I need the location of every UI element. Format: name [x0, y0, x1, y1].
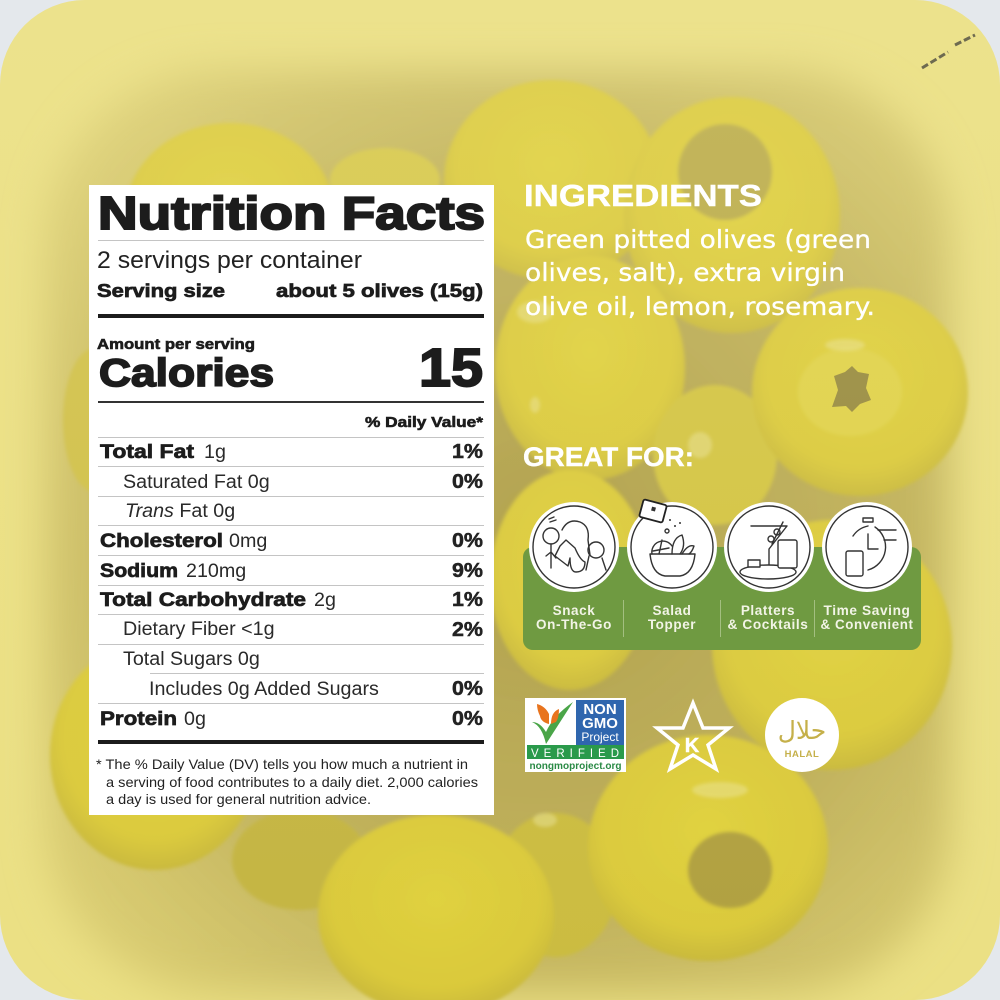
panel: great for band: [523, 499, 921, 650]
icon: time saving: [822, 502, 912, 592]
badge: star k kosher: [657, 703, 729, 769]
ingredients text: olive oil, lemon, rosemary.: [525, 292, 875, 321]
row: total fat: Total Fat: [100, 441, 195, 463]
row: total carbohydrate: 1%: [452, 589, 483, 611]
label: snack on the go: Snack: [553, 603, 595, 618]
daily value header: % Daily Value*: [365, 414, 483, 431]
icon: snack on the go: [529, 502, 619, 592]
row: saturated fat: Saturated Fat 0g: [123, 471, 270, 493]
serving size: about 5 olives (15g): [276, 281, 483, 301]
label: salad topper: Salad: [652, 603, 692, 618]
calories block: [97, 337, 483, 398]
row: total fat: [100, 441, 483, 463]
row: dietary fiber: Dietary Fiber <1g: [123, 618, 275, 640]
row: total fat: 1%: [452, 441, 483, 463]
ingredients text: Green pitted olives (green: [525, 225, 871, 254]
badge: halal: HALAL: [785, 749, 819, 760]
label: time saving and convenient: Time Saving: [824, 603, 910, 618]
row: dietary fiber: [123, 618, 483, 641]
heading: ingredients: INGREDIENTS: [524, 178, 762, 213]
row: trans fat: Trans Fat 0g: [125, 500, 235, 522]
label: platters and cocktails: [728, 603, 808, 632]
row: protein: 0%: [452, 708, 483, 730]
panel: nutrition facts: [89, 185, 494, 815]
row: protein: [100, 708, 483, 730]
label: salad topper: [648, 603, 696, 632]
label: salad topper: Topper: [648, 617, 696, 632]
badge: non gmo project verified: NON: [583, 701, 617, 718]
row: added sugars: [149, 678, 483, 700]
badge: non gmo project verified: VERIFIED: [531, 748, 619, 760]
row: total carbohydrate: Total Carbohydrate: [100, 589, 306, 611]
badge: non gmo project verified: nongmoproject.org: [530, 761, 622, 772]
row: total fat: 1g: [204, 441, 226, 463]
row: saturated fat: [123, 471, 483, 493]
icon: platters and cocktails: [724, 502, 814, 592]
badge: non gmo project verified: GMO: [582, 715, 618, 732]
icon: salad topper: [627, 499, 717, 592]
label: platters and cocktails: Platters: [741, 603, 795, 618]
calories block: 15: [419, 338, 483, 398]
row: protein: Protein: [100, 708, 177, 730]
row: total carbohydrate: [100, 589, 483, 611]
row: cholesterol: 0mg: [229, 530, 267, 552]
row: total carbohydrate: 2g: [314, 589, 336, 611]
row: sodium: [100, 560, 483, 582]
serving size: Serving size: [97, 281, 225, 301]
ingredients text: olives, salt), extra virgin: [525, 258, 845, 287]
row: dietary fiber: 2%: [452, 619, 483, 641]
heading: great for: GREAT FOR:: [523, 442, 694, 472]
row: sodium: 9%: [452, 560, 483, 582]
footnote: a day is used for general nutrition advice.: [106, 791, 371, 807]
label: time saving and convenient: [820, 603, 914, 632]
footnote: * The % Daily Value (DV) tells you how much a nutrient in: [96, 756, 468, 772]
label: snack on the go: On-The-Go: [536, 617, 612, 632]
row: cholesterol: [100, 530, 483, 552]
footnote: a serving of food contributes to a daily diet. 2,000 calories: [106, 774, 478, 790]
badge: halal: [765, 698, 839, 772]
badge: non gmo project verified: [525, 698, 626, 772]
badge: halal: حلال: [778, 716, 826, 745]
row: cholesterol: Cholesterol: [100, 530, 223, 552]
calories block: Amount per serving: [97, 337, 255, 353]
row: saturated fat: 0%: [452, 471, 483, 493]
row: protein: 0g: [184, 708, 206, 730]
label: snack on the go: [536, 603, 612, 632]
row: added sugars: 0%: [452, 678, 483, 700]
footnote: [96, 756, 478, 807]
row: sodium: 210mg: [186, 560, 246, 582]
serving size: [97, 281, 483, 301]
badge: non gmo project verified: Project: [581, 730, 619, 744]
servings per container: 2 servings per container: [97, 247, 362, 274]
label: time saving and convenient: & Convenient: [820, 617, 914, 632]
row: cholesterol: 0%: [452, 530, 483, 552]
row: sodium: Sodium: [100, 560, 178, 582]
title: Nutrition Facts: Nutrition Facts: [98, 187, 485, 239]
row: added sugars: Includes 0g Added Sugars: [149, 678, 379, 700]
row: total sugars: Total Sugars 0g: [123, 648, 260, 670]
ingredients text: [525, 225, 875, 321]
badge: star k kosher: K: [685, 735, 700, 757]
label: platters and cocktails: & Cocktails: [728, 617, 808, 632]
calories block: Calories: [99, 352, 274, 395]
